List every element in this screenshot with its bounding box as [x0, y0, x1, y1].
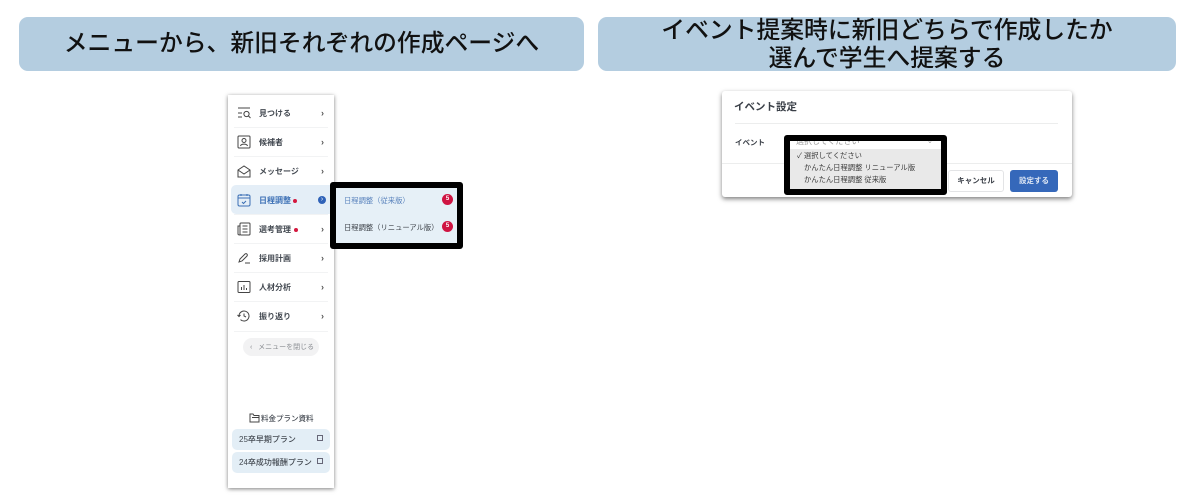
- menu item: 日程調整 (active): [231, 185, 334, 214]
- badge: count 5: [442, 194, 453, 205]
- callout: submenu with black highlight: [330, 182, 463, 249]
- heading: left banner: メニューから、新旧それぞれの作成ページへ: [64, 30, 539, 57]
- menu item: 人材分析: ›: [321, 282, 324, 292]
- submenu item: 日程調整（リニューアル版）: 日程調整（リニューアル版）: [344, 223, 438, 232]
- menu item: 候補者: [238, 136, 324, 148]
- menu item: 選考管理: [238, 222, 324, 236]
- menu item: 振り返り: 振り返り: [259, 312, 291, 321]
- menu item: 候補者: 候補者: [259, 138, 283, 147]
- panel: sidebar menu: [228, 95, 334, 488]
- menu item: 候補者: ›: [321, 137, 324, 147]
- heading: right banner: 選んで学生へ提案する: [769, 45, 1005, 72]
- callout: dropdown with black highlight: [784, 135, 947, 195]
- dropdown options: 選択してください: [804, 151, 862, 160]
- label: 料金プラン資料: 料金プラン資料: [261, 414, 314, 423]
- button: キャンセル: [948, 170, 1004, 192]
- heading: right banner: [598, 17, 1176, 71]
- menu item: 振り返り: [237, 310, 324, 322]
- badge: count 5: 5: [446, 223, 449, 229]
- submenu item: 日程調整（従来版）: 日程調整（従来版）: [344, 196, 410, 205]
- menu item: 採用計画: ›: [321, 253, 324, 263]
- button: メニューを閉じる: ‹ メニューを閉じる: [250, 344, 314, 351]
- panel: event settings dialog: [722, 91, 1072, 197]
- button: 設定する: [1010, 170, 1058, 192]
- menu item: 見つける: [238, 108, 324, 118]
- menu item: メッセージ: ›: [321, 166, 324, 176]
- button: 設定する: 設定する: [1019, 176, 1049, 185]
- heading: right banner: イベント提案時に新旧どちらで作成したか: [661, 17, 1113, 44]
- button: メニューを閉じる: [243, 338, 319, 356]
- field label: イベント: イベント: [735, 138, 765, 147]
- icon: calendar: [238, 194, 250, 206]
- menu item: 採用計画: [238, 253, 324, 264]
- plan button: 25卒早期プラン: [232, 429, 330, 450]
- button: キャンセル: キャンセル: [957, 176, 995, 185]
- menu item: 人材分析: 人材分析: [259, 283, 291, 292]
- menu item: 振り返り: ›: [321, 311, 324, 321]
- dropdown options: かんたん日程調整 リニューアル版: [804, 163, 915, 172]
- menu item: メッセージ: [238, 166, 324, 178]
- icon: blue chevron badge: ›: [321, 196, 323, 203]
- plan button: 25卒早期プラン: 25卒早期プラン: [239, 435, 296, 444]
- menu item: 見つける: 見つける: [259, 109, 291, 118]
- select placeholder: [790, 141, 941, 149]
- badge: count 5: [442, 221, 453, 232]
- dropdown options: [797, 151, 915, 184]
- menu item: メッセージ: メッセージ: [259, 167, 299, 176]
- menu item: 見つける: ›: [321, 108, 324, 118]
- plan button: 24卒成功報酬プラン: [232, 452, 330, 473]
- menu item: 人材分析: [238, 281, 324, 293]
- menu item: 選考管理: 選考管理: [259, 225, 291, 234]
- dropdown options: かんたん日程調整 従来版: [804, 175, 886, 184]
- menu item: 日程調整 (active): 日程調整: [259, 196, 291, 205]
- menu item: 採用計画: 採用計画: [259, 254, 291, 263]
- icon: blue chevron badge: [318, 196, 326, 204]
- plan button: 24卒成功報酬プラン: 24卒成功報酬プラン: [239, 458, 312, 467]
- badge: count 5: 5: [446, 196, 449, 202]
- heading: left banner: [19, 17, 584, 71]
- dialog title: イベント設定: [734, 101, 797, 113]
- menu item: 選考管理: ›: [321, 224, 324, 234]
- dropdown options: ✓: [797, 151, 802, 160]
